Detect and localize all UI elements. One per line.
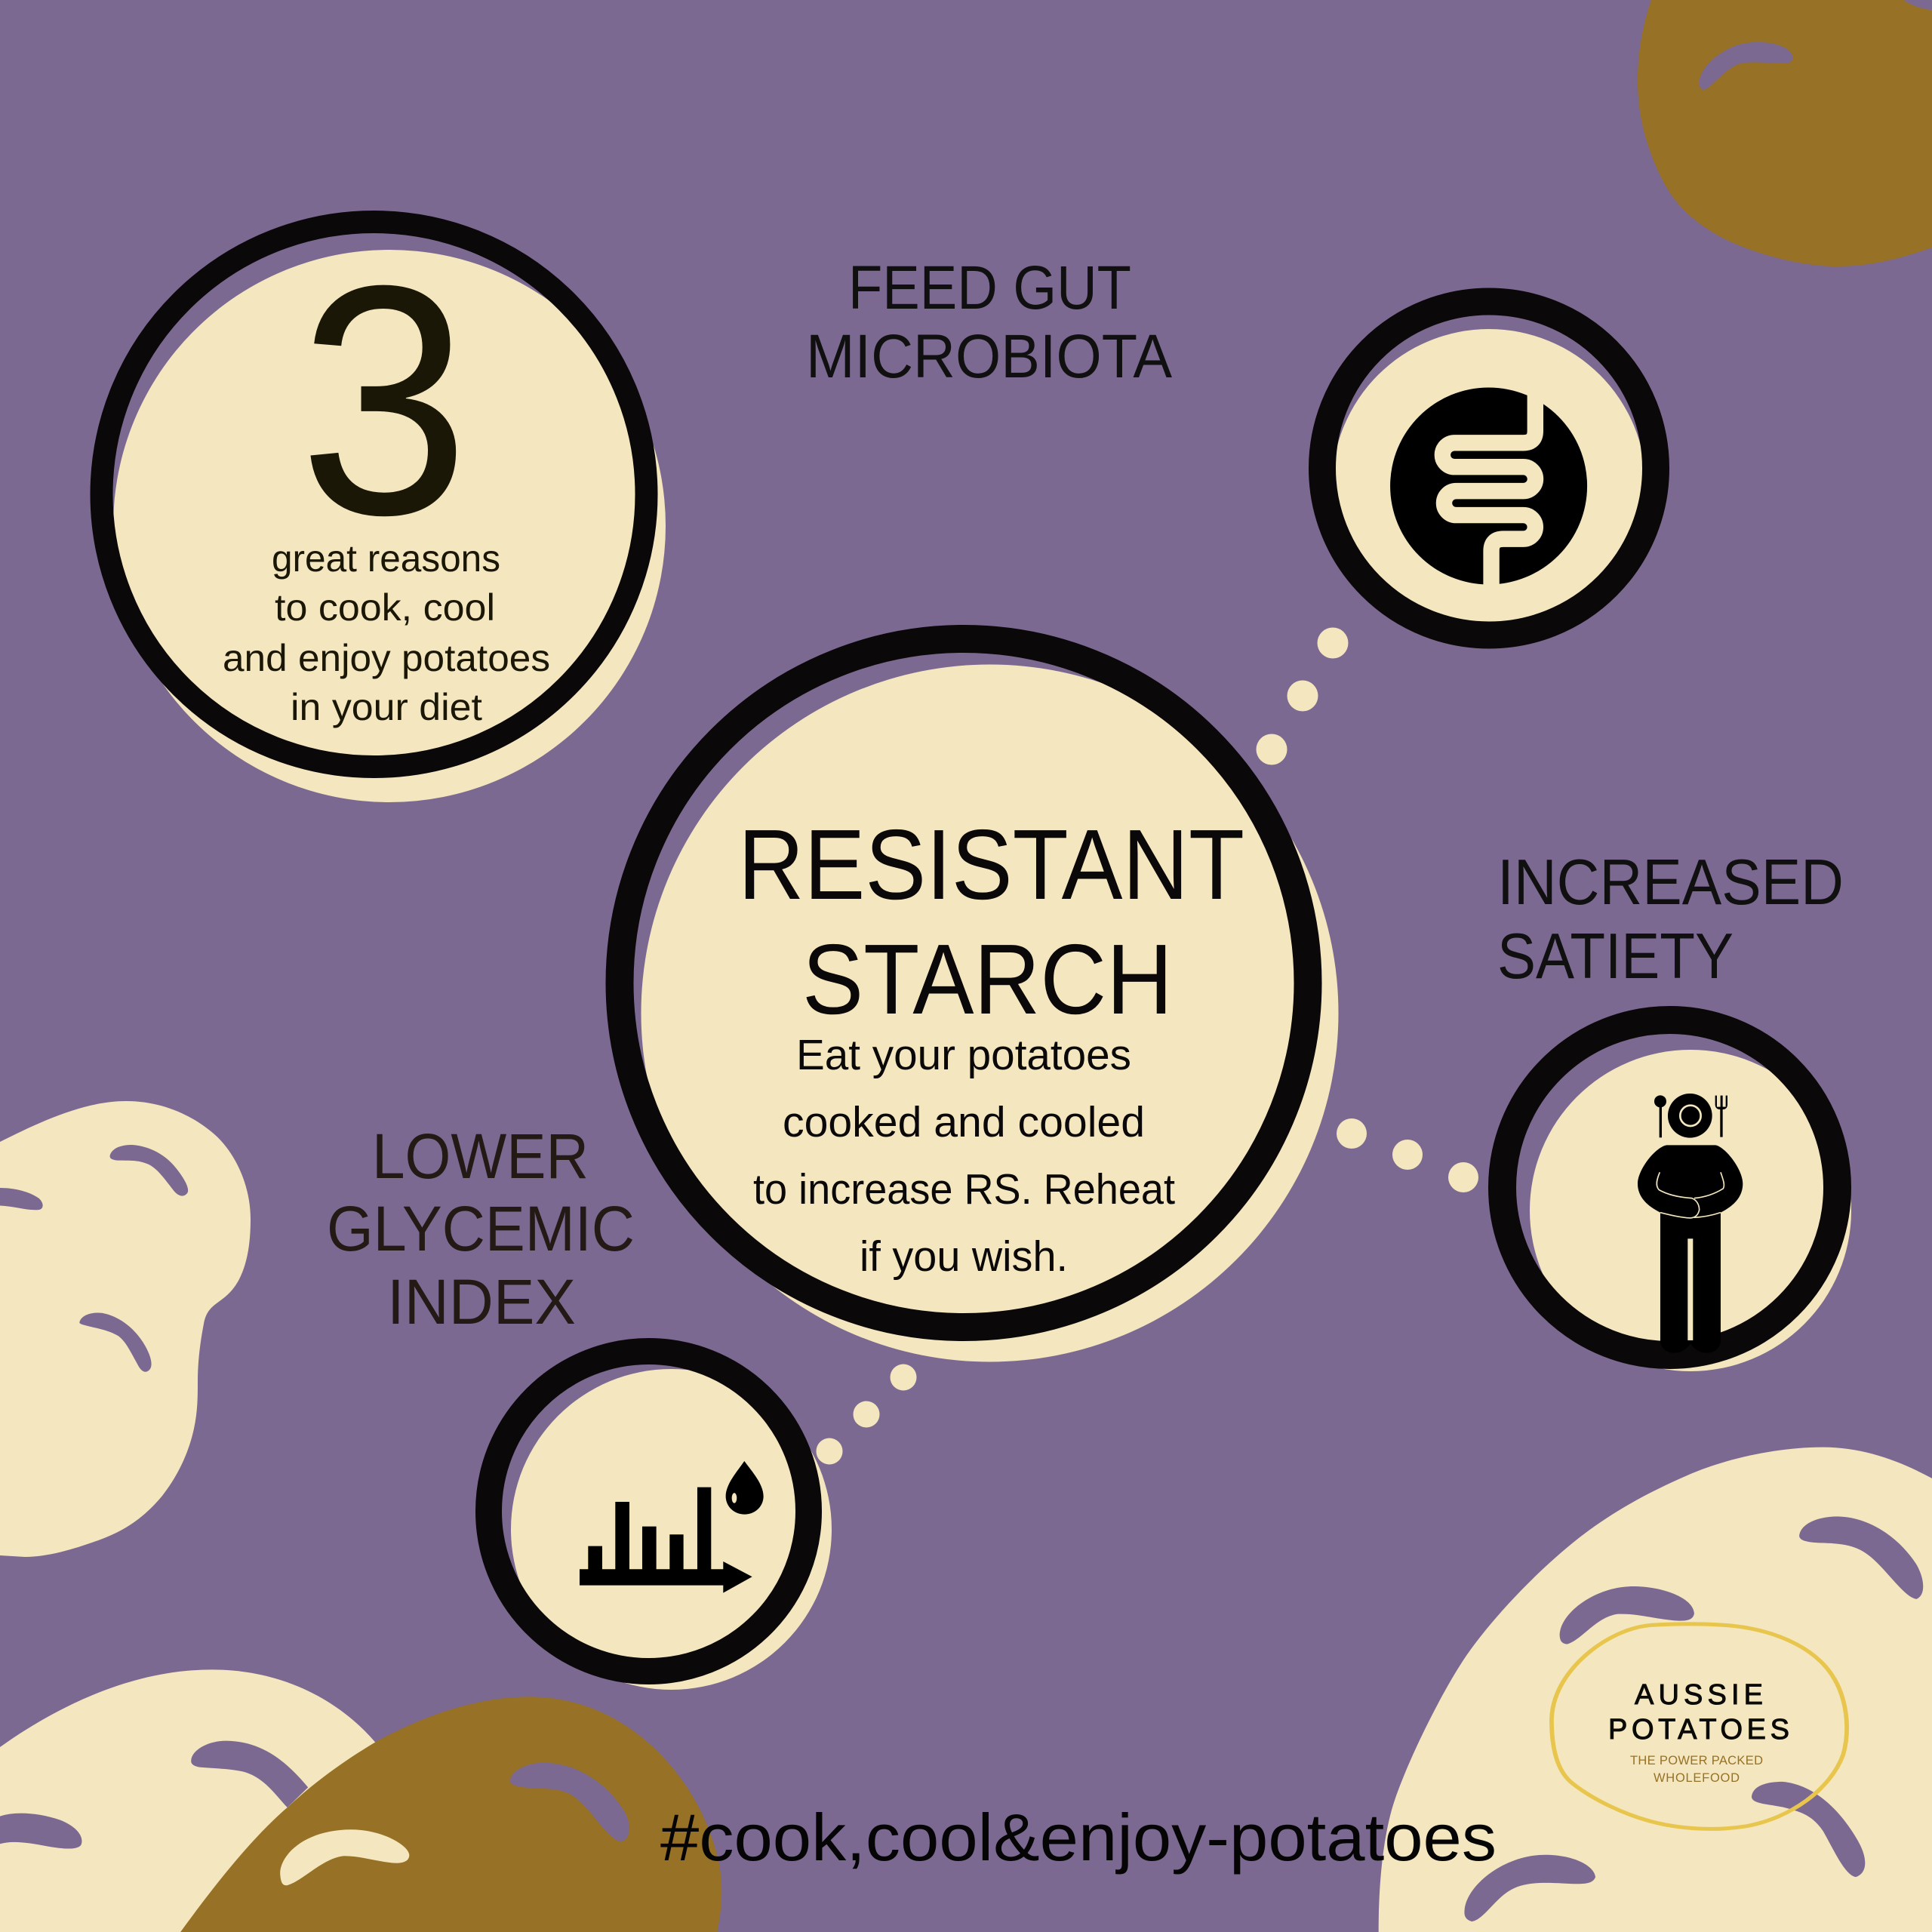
heading: feed gut microbiota: MICROBIOTA: [806, 322, 1172, 391]
heading: feed gut microbiota: FEED GUT: [848, 254, 1131, 322]
body text: to increase RS. Reheat: [753, 1165, 1175, 1214]
heading: lower glycemic index: GLYCEMIC: [327, 1193, 635, 1264]
hashtag: #cook,cool&enjoy-potatoes: [660, 1800, 1497, 1875]
logo: Aussie Potatoes: WHOLEFOOD: [1654, 1771, 1740, 1785]
logo: Aussie Potatoes: POTATOES: [1608, 1714, 1789, 1746]
logo: Aussie Potatoes: THE POWER PACKED: [1630, 1754, 1763, 1767]
body text: Eat your potatoes: [796, 1031, 1131, 1079]
potato: bottom left cream: [0, 1669, 433, 1932]
body text: cooked and cooled: [783, 1098, 1145, 1146]
logo: Aussie Potatoes: AUSSIE: [1635, 1679, 1763, 1711]
dots: satiety connector: [1337, 1118, 1478, 1192]
body text: if you wish.: [860, 1232, 1068, 1281]
heading: increased satiety: [1497, 847, 1844, 992]
heading: lower glycemic index: LOWER: [372, 1121, 589, 1192]
title: STARCH: [802, 924, 1173, 1035]
reasons text: great reasons: [272, 537, 500, 580]
dots: gut connector: [1256, 628, 1348, 765]
panel: glycemic icon circle: [489, 1351, 832, 1690]
number 3: 3: [299, 217, 469, 583]
title: RESISTANT: [738, 809, 1244, 920]
heading: lower glycemic index: INDEX: [387, 1266, 576, 1337]
panel: resistant starch: [620, 638, 1339, 1361]
potato: left cream: [0, 1101, 251, 1557]
panel: gut icon circle: [1322, 302, 1656, 643]
reasons text: to cook, cool: [275, 586, 495, 629]
icon: bar chart with droplet: [580, 1461, 764, 1593]
potato: bottom right cream: [1379, 1447, 1932, 1932]
heading: increased satiety: SATIETY: [1497, 921, 1734, 992]
potato: top right brown: [1638, 0, 1932, 266]
reasons text: in your diet: [291, 686, 482, 728]
logo: Aussie Potatoes: [1552, 1624, 1847, 1829]
panel: 3 great reasons: [101, 217, 666, 802]
body text: [753, 1031, 1175, 1281]
title: [738, 809, 1244, 1035]
heading: increased satiety: INCREASED: [1497, 847, 1844, 918]
potato: bottom left brown: [180, 1697, 721, 1932]
heading: lower glycemic index: [327, 1121, 635, 1337]
dots: glycemic connector: [817, 1364, 916, 1464]
icon: person with plate: [1638, 1094, 1743, 1353]
reasons text: and enjoy potatoes: [223, 637, 550, 679]
heading: feed gut microbiota: [806, 254, 1172, 391]
icon: intestine: [1390, 387, 1587, 589]
reasons text: [223, 537, 550, 728]
panel: satiety icon circle: [1502, 1020, 1851, 1371]
